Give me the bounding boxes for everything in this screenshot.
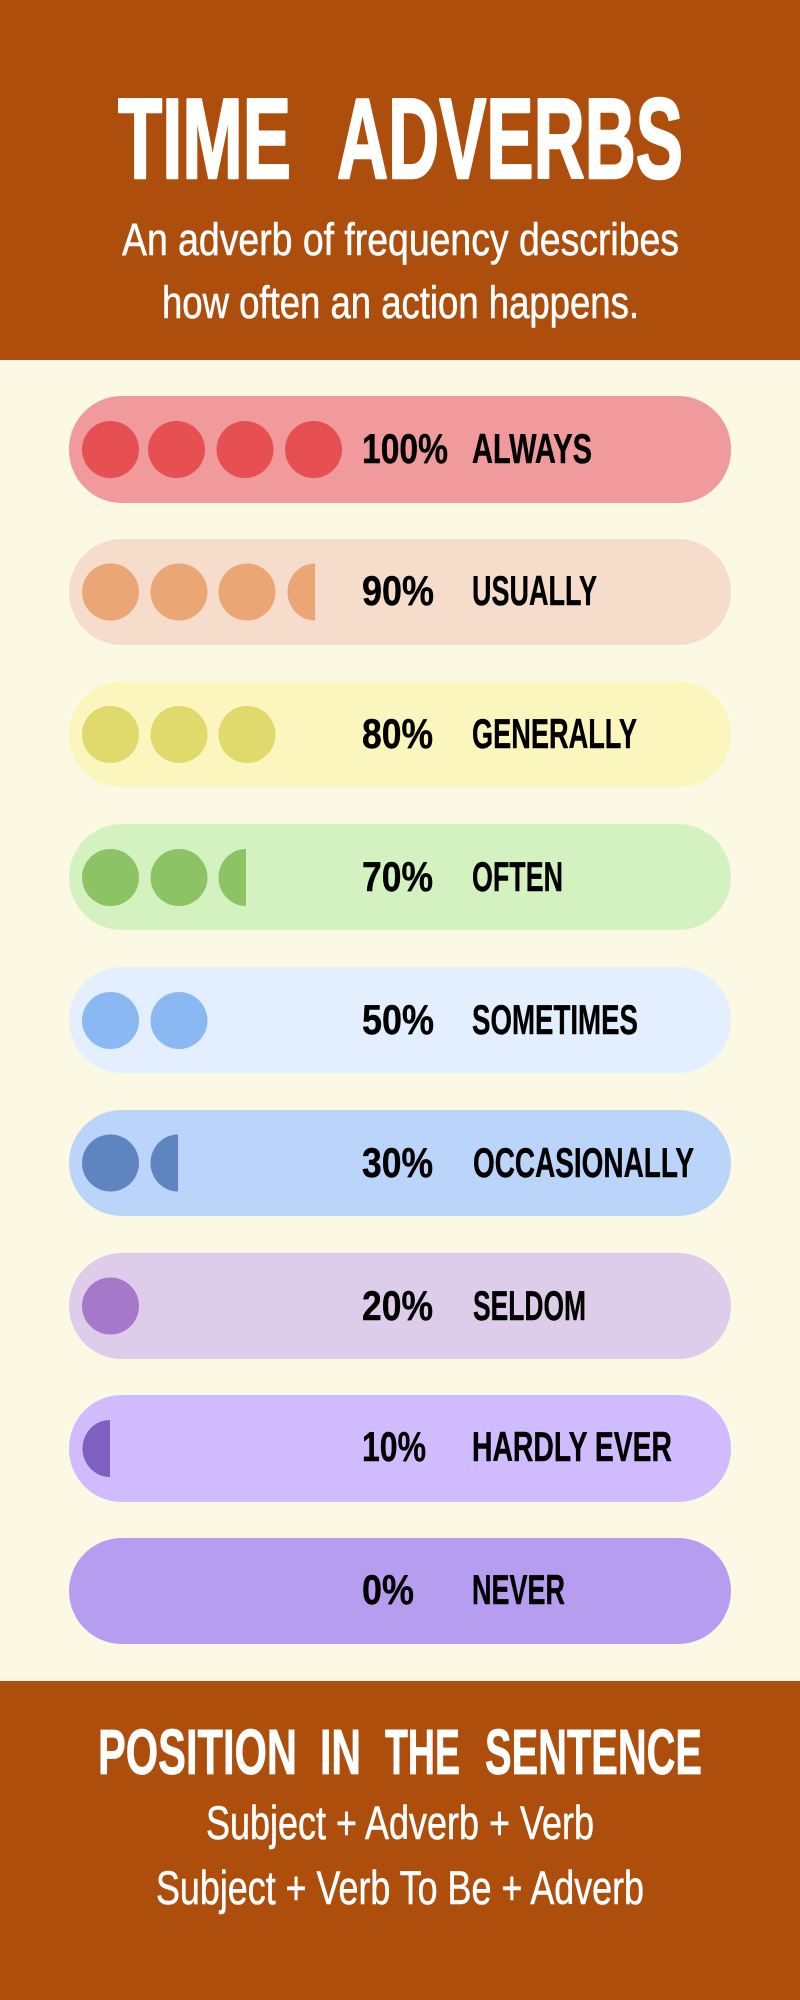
row: 100% always: 100%	[362, 425, 448, 472]
row: 10% hardly ever	[69, 1395, 731, 1502]
footer heading	[98, 1716, 702, 1788]
row: 30% occasionally: 30%	[362, 1139, 433, 1186]
row: 90% usually	[69, 539, 731, 645]
title	[118, 76, 683, 203]
row: 10% hardly ever: HARDLY EVER	[472, 1423, 672, 1470]
row: 0% never	[69, 1538, 731, 1644]
row: 20% seldom: 20%	[362, 1282, 433, 1329]
row: 90% usually: USUALLY	[472, 567, 597, 614]
row: 20% seldom	[69, 1253, 731, 1359]
row: 100% always: ALWAYS	[472, 425, 592, 472]
row: 70% often	[69, 824, 731, 930]
row: 50% sometimes: 50%	[362, 996, 434, 1043]
footer band	[0, 1681, 800, 2000]
row: 20% seldom: SELDOM	[473, 1282, 586, 1329]
row: 50% sometimes	[69, 967, 731, 1073]
subtitle	[122, 214, 679, 328]
footer heading: THE	[385, 1716, 460, 1788]
footer heading: IN	[320, 1716, 361, 1788]
subtitle: An adverb of frequency describes	[122, 214, 679, 265]
subtitle: how often an action happens.	[162, 277, 639, 328]
title: TIME	[118, 76, 291, 203]
row: 10% hardly ever: 10%	[362, 1423, 426, 1470]
row: 90% usually: 90%	[362, 567, 434, 614]
row: 80% generally: 80%	[362, 710, 433, 757]
footer formulas: Subject + Verb To Be + Adverb	[156, 1861, 644, 1914]
row: 0% never: NEVER	[472, 1566, 565, 1613]
row: 70% often: 70%	[362, 853, 433, 900]
row: 30% occasionally	[69, 1110, 731, 1216]
row: 80% generally	[69, 681, 731, 787]
row: 50% sometimes: SOMETIMES	[472, 996, 638, 1043]
footer formulas	[156, 1796, 644, 1914]
footer heading: POSITION	[98, 1716, 297, 1788]
footer formulas: Subject + Adverb + Verb	[206, 1796, 594, 1849]
row: 100% always	[69, 396, 731, 503]
row: 30% occasionally: OCCASIONALLY	[473, 1139, 694, 1186]
row: 70% often: OFTEN	[472, 853, 563, 900]
row: 0% never: 0%	[362, 1566, 414, 1613]
row: 80% generally: GENERALLY	[472, 710, 637, 757]
header band	[0, 0, 800, 360]
